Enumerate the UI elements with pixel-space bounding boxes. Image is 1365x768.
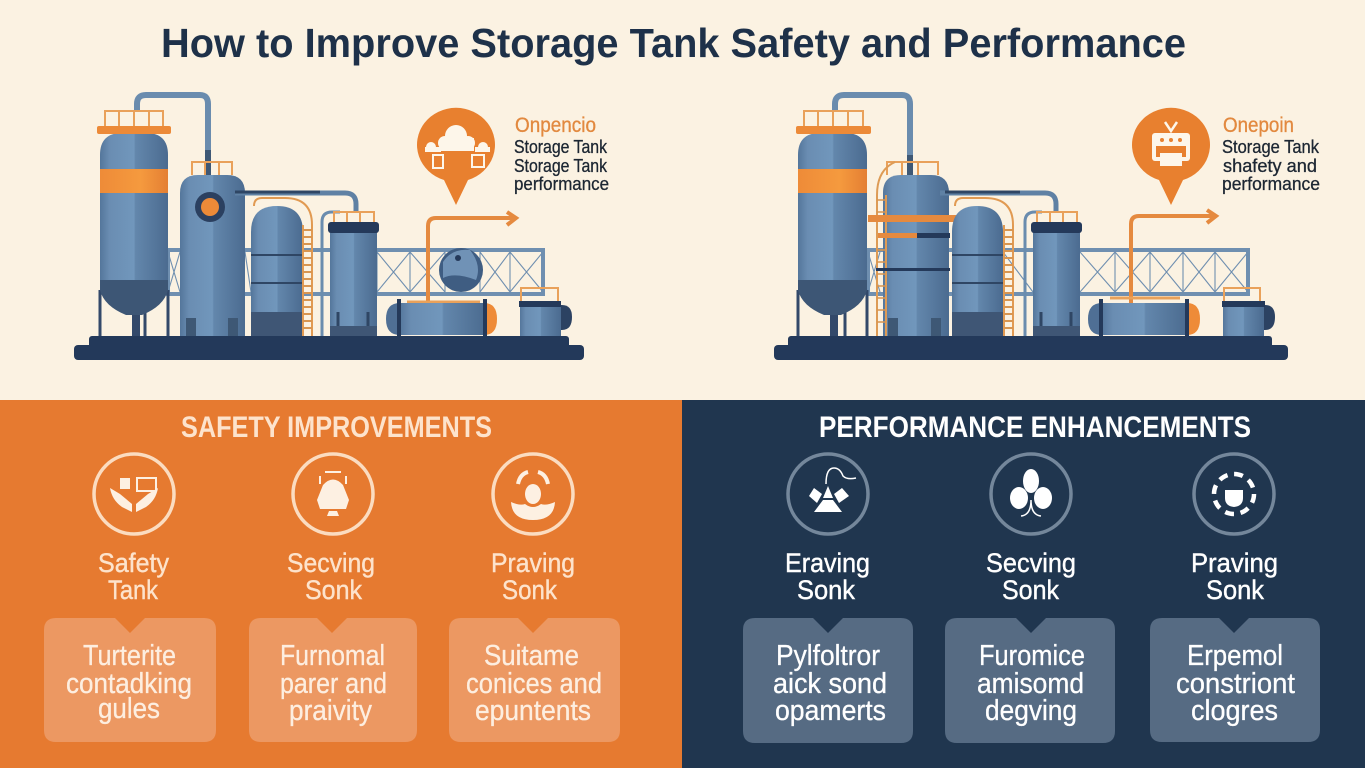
card bbox=[945, 618, 1115, 743]
item: secving sonk bbox=[249, 454, 417, 742]
panel: performance enhancements bbox=[682, 400, 1365, 768]
callout text: Storage Tank bbox=[514, 137, 608, 157]
label bbox=[1191, 548, 1278, 605]
tank 2 bbox=[180, 162, 356, 337]
card bbox=[743, 618, 913, 743]
card bbox=[449, 618, 620, 742]
tank 3 with ladder bbox=[251, 198, 312, 337]
heading: performance: PERFORMANCE ENHANCEMENTS bbox=[819, 411, 1251, 444]
label bbox=[986, 548, 1076, 605]
title: How to Improve Storage Tank Safety and Performance bbox=[161, 20, 1186, 66]
icon: person bbox=[493, 454, 573, 534]
horizontal tank bbox=[1088, 298, 1200, 336]
item: eraving sonk bbox=[743, 454, 913, 743]
horizontal tank bbox=[386, 299, 497, 336]
background bbox=[0, 0, 1365, 400]
illustration: left tank facility bbox=[74, 95, 584, 360]
label: Sonk bbox=[797, 575, 855, 605]
label: Secving bbox=[986, 548, 1076, 578]
label: Sonk bbox=[1002, 575, 1059, 605]
callout text: performance bbox=[1222, 174, 1320, 194]
card bbox=[44, 618, 216, 742]
icon: hands bbox=[94, 454, 174, 534]
card: conices and bbox=[466, 668, 602, 700]
card: Erpemol bbox=[1187, 640, 1283, 672]
callout text: shafety and bbox=[1223, 156, 1317, 176]
icon: shield figure bbox=[293, 454, 373, 534]
label bbox=[491, 548, 575, 605]
icon: cloud bbox=[425, 125, 490, 168]
label: Secving bbox=[287, 548, 375, 578]
label: Safety bbox=[98, 548, 169, 578]
base platform bbox=[774, 336, 1288, 360]
item: praving sonk bbox=[1150, 454, 1320, 742]
card: epuntents bbox=[475, 695, 591, 727]
icon: plant bbox=[788, 454, 868, 534]
label bbox=[785, 548, 870, 605]
card bbox=[249, 618, 417, 742]
callout text: Storage Tank bbox=[1222, 137, 1320, 157]
callout text bbox=[514, 114, 609, 194]
callout text: Onpencio bbox=[515, 114, 596, 137]
card: Pylfoltror bbox=[776, 640, 880, 672]
icon: gear badge bbox=[1194, 454, 1274, 534]
small tank bbox=[1222, 288, 1275, 337]
card: parer and bbox=[280, 668, 387, 700]
card: contadking bbox=[66, 668, 192, 700]
label: Eraving bbox=[785, 548, 870, 578]
label: Sonk bbox=[305, 575, 362, 605]
item: safety tank bbox=[44, 454, 216, 742]
icon: leaves bbox=[991, 454, 1071, 534]
callout text: Storage Tank bbox=[514, 156, 608, 176]
heading: safety: SAFETY IMPROVEMENTS bbox=[181, 411, 492, 444]
callout: left bbox=[417, 108, 609, 205]
pin bbox=[417, 108, 495, 205]
card bbox=[1150, 618, 1320, 742]
orange flow arrow bbox=[1131, 210, 1216, 304]
tank 4 bbox=[1025, 212, 1082, 337]
card: praivity bbox=[289, 695, 372, 727]
truss bbox=[168, 250, 543, 294]
callout text: Onepoin bbox=[1223, 114, 1294, 137]
tank 4 bbox=[322, 212, 379, 337]
tank 1 bbox=[796, 95, 910, 337]
tank 2 with ladder bbox=[868, 162, 1056, 337]
illustration: right tank facility bbox=[774, 95, 1288, 360]
callout text bbox=[1222, 114, 1320, 194]
tank 3 with ladder bbox=[952, 198, 1013, 337]
card: Furomice bbox=[979, 640, 1085, 672]
label: Sonk bbox=[502, 575, 557, 605]
item: praving sonk bbox=[449, 454, 620, 742]
card: Suitame bbox=[484, 640, 579, 672]
label: Praving bbox=[491, 548, 575, 578]
icon: monitor bbox=[1152, 122, 1190, 166]
label bbox=[287, 548, 375, 605]
card: aick sond bbox=[773, 668, 887, 700]
callout text: performance bbox=[514, 174, 609, 194]
card: degving bbox=[985, 695, 1077, 727]
card: amisomd bbox=[977, 668, 1084, 700]
callout: right bbox=[1132, 108, 1320, 205]
label: Sonk bbox=[1206, 575, 1264, 605]
base platform bbox=[74, 336, 584, 360]
truss bbox=[868, 250, 1248, 294]
orange flow arrow bbox=[428, 212, 516, 304]
card: gules bbox=[98, 693, 160, 725]
small tank bbox=[519, 288, 572, 337]
panel: safety improvements bbox=[0, 400, 682, 768]
sphere vessel bbox=[439, 248, 483, 292]
card: clogres bbox=[1191, 695, 1278, 727]
tank 1 bbox=[97, 95, 208, 337]
card: opamerts bbox=[775, 695, 886, 727]
card: Furnomal bbox=[280, 640, 385, 672]
card: constriont bbox=[1176, 668, 1295, 700]
item: secving sonk bbox=[945, 454, 1115, 743]
label: Praving bbox=[1191, 548, 1278, 578]
label: Tank bbox=[108, 575, 158, 605]
label bbox=[98, 548, 169, 605]
pin bbox=[1132, 108, 1210, 205]
card: Turterite bbox=[83, 640, 176, 672]
